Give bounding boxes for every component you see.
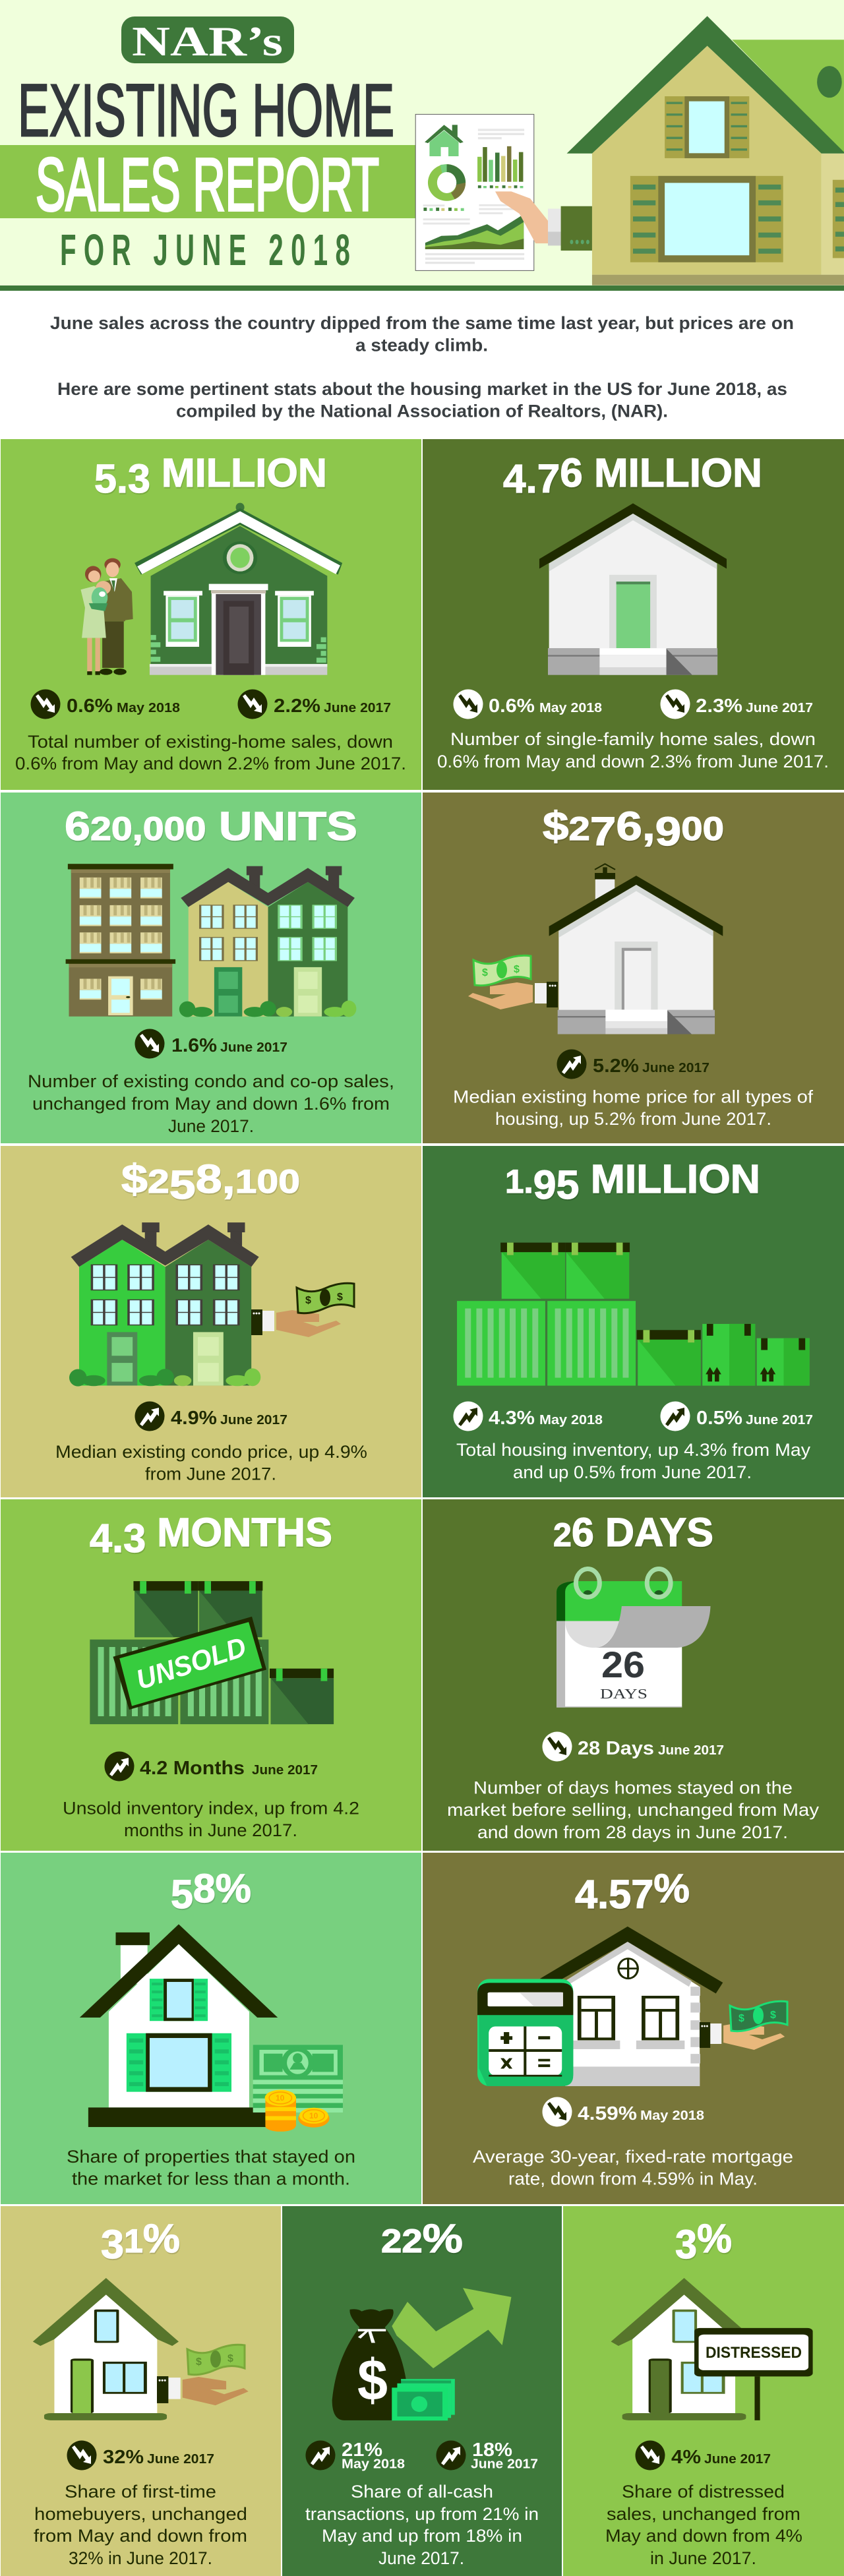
- heading: 8,: [196, 1156, 235, 1201]
- badge: down 2.2% June 2017: 2.2%: [274, 696, 320, 717]
- illustration: white house with chimney: [549, 864, 723, 1034]
- description: Total housing inventory, up 4.3% from May: [456, 1440, 811, 1460]
- panel: 5.3 million total sales: [1, 439, 421, 790]
- sign text: unsold: UNSOLD: [133, 1631, 250, 1695]
- description: June 2017.: [168, 1116, 254, 1136]
- badge: down 2.3% June 2017: June 2017: [746, 701, 813, 715]
- illustration: white house: [539, 503, 727, 675]
- description: [34, 2482, 247, 2568]
- panel: 58% sold within a month: [1, 1853, 421, 2204]
- intro text: June sales across the country dipped from the same time last year, but prices are on: [50, 313, 794, 333]
- description: homebuyers, unchanged: [34, 2504, 247, 2524]
- badge: up 5.2% June 2017: 5.2%: [593, 1056, 639, 1077]
- heading: 7: [590, 809, 616, 854]
- description: and up 0.5% from June 2017.: [513, 1462, 752, 1482]
- panel: 4.3 months unsold inventory: [1, 1499, 421, 1851]
- heading: %: [653, 1866, 690, 1911]
- description: June 2017.: [378, 2548, 464, 2568]
- panel: 620,000 units condo sales: [1, 793, 421, 1143]
- heading: 3: [101, 2222, 124, 2267]
- illustration: big house: [567, 16, 844, 285]
- badge: down 2.3% June 2017: 2.3%: [696, 696, 742, 717]
- description: rate, down from 4.59% in May.: [508, 2169, 758, 2189]
- heading: MONTHS: [146, 1510, 332, 1555]
- description: sales, unchanged from: [607, 2504, 800, 2524]
- badge: down 4% June 2017: 4%: [671, 2447, 701, 2468]
- icon: calendar: 26: [601, 1644, 645, 1685]
- panel: 26 days on market: [423, 1499, 844, 1851]
- description: the market for less than a month.: [72, 2169, 350, 2189]
- panel: 3% distressed sales: [563, 2206, 844, 2576]
- illustration: report held by hand: [415, 114, 592, 270]
- heading: 9: [655, 809, 681, 854]
- panel: $258,100 median condo price: [1, 1146, 421, 1497]
- description: Average 30-year, fixed-rate mortgage: [473, 2147, 793, 2167]
- heading: MILLION: [150, 450, 327, 495]
- heading: 100: [235, 1163, 300, 1200]
- description: Median existing condo price, up 4.9%: [55, 1442, 367, 1462]
- illustration: house with distressed sign: [611, 2278, 813, 2420]
- badge: up 0.5% June 2017: 0.5%: [696, 1408, 742, 1429]
- badge: down 1.6% June 2017: June 2017: [220, 1040, 287, 1055]
- description: Share of distressed: [622, 2482, 785, 2501]
- badge: down 0.6% May 2018: May 2018: [539, 701, 602, 715]
- description: Total number of existing-home sales, down: [28, 732, 393, 752]
- description: market before selling, unchanged from May: [447, 1800, 820, 1820]
- heading: 6 MILLION: [560, 450, 762, 495]
- badge: up 18% June 2017: 18%: [472, 2440, 512, 2461]
- description: from May and down from: [34, 2526, 247, 2546]
- badge: down 2.2% June 2017: [237, 690, 391, 719]
- title: sales report: SALES REPORT: [36, 143, 379, 226]
- badge: up 4.3% May 2018: [454, 1402, 603, 1431]
- heading: 1.: [505, 1163, 533, 1200]
- illustration: green condos: [69, 1222, 260, 1387]
- description: Number of days homes stayed on the: [473, 1778, 793, 1797]
- heading: 26 DAYS: [553, 1510, 713, 1555]
- description: Share of all-cash: [351, 2482, 493, 2501]
- panel: 22% all-cash transactions: [282, 2206, 562, 2576]
- badge: up 4.9% June 2017: [135, 1402, 287, 1431]
- illustration: house and calculator: [477, 1927, 723, 2086]
- green title band: [0, 145, 417, 218]
- coin labels: 10: [276, 2093, 285, 2103]
- panel: 31% first-time homebuyers: [1, 2206, 281, 2576]
- badge: down 0.6% May 2018: May 2018: [117, 701, 180, 715]
- description: from June 2017.: [145, 1464, 276, 1483]
- illustration: money bag, arrow and cash: $: [357, 2347, 388, 2412]
- description: [456, 1440, 811, 1482]
- illustration: house with money and coins: [80, 1924, 343, 2132]
- coin labels: 10: [309, 2111, 318, 2120]
- illustration: family and green house: [80, 503, 342, 675]
- badge: up 4.2 months June 2017: [104, 1751, 318, 1782]
- illustration: money bag, arrow and cash: [332, 2288, 511, 2420]
- badge: up 21% May 2018: [306, 2440, 405, 2471]
- badge: down 1.6% June 2017: 1.6%: [171, 1035, 217, 1056]
- description: [28, 1071, 394, 1136]
- heading: 4.3: [90, 1516, 146, 1561]
- badge: down 0.6% May 2018: [30, 690, 180, 719]
- badge: up 4.3% May 2018: 4.3%: [489, 1408, 535, 1429]
- heading: 95: [533, 1162, 579, 1207]
- heading: 4.57: [575, 1872, 653, 1917]
- description: Median existing home price for all types of: [453, 1087, 814, 1106]
- badge: up 21% May 2018: May 2018: [342, 2457, 405, 2471]
- heading: 5.3: [94, 456, 150, 501]
- heading: 22%: [381, 2216, 463, 2261]
- icon: calendar: DAYS: [600, 1686, 648, 1702]
- illustration: house with distressed sign: DISTRESSED: [706, 2344, 802, 2362]
- description: months in June 2017.: [124, 1820, 297, 1840]
- badge: down 0.6% May 2018: [454, 690, 602, 719]
- heading: $2: [121, 1156, 166, 1201]
- title: for june 2018: FOR JUNE 2018: [60, 225, 350, 275]
- badge: up 5.2% June 2017: [557, 1050, 709, 1079]
- badge: up 4.2 months June 2017: June 2017: [252, 1763, 318, 1778]
- heading: 8%: [193, 1866, 251, 1911]
- description: housing, up 5.2% from June 2017.: [495, 1109, 771, 1129]
- heading: 5: [169, 1162, 196, 1207]
- coin labels: [276, 2093, 318, 2120]
- description: [447, 1778, 820, 1842]
- description: Unsold inventory index, up from 4.2: [63, 1799, 359, 1818]
- badge: down 32% June 2017: [67, 2441, 214, 2470]
- icon: hand holding money: [157, 2345, 249, 2405]
- description: and down from 28 days in June 2017.: [477, 1822, 788, 1842]
- heading: 00: [681, 810, 724, 847]
- heading: 3: [675, 2222, 697, 2267]
- badge: down 28 days June 2017: 28 Days: [578, 1738, 654, 1759]
- badge: up 0.5% June 2017: June 2017: [746, 1413, 813, 1427]
- description: 0.6% from May and down 2.3% from June 2017.: [437, 752, 829, 771]
- illustration: unsold boxes: [90, 1581, 334, 1724]
- badge: down 2.2% June 2017: June 2017: [324, 701, 391, 715]
- badge: down 4.59% May 2018: [542, 2097, 704, 2127]
- intro text: compiled by the National Association of Realtors, (NAR).: [176, 401, 668, 421]
- description: [63, 1799, 359, 1840]
- badge: up 18% June 2017: [437, 2440, 538, 2471]
- badge: up 4.3% May 2018: May 2018: [539, 1413, 603, 1427]
- panel: $276,900 median home price: [423, 793, 844, 1143]
- intro text: Here are some pertinent stats about the housing market in the US for June 2018, as: [57, 379, 787, 399]
- description: unchanged from May and down 1.6% from: [32, 1094, 390, 1114]
- badge: up 5.2% June 2017: June 2017: [642, 1061, 709, 1075]
- panel: 4.76 million single-family sales: [423, 439, 844, 790]
- badge: down 2.3% June 2017: [661, 690, 813, 719]
- intro text: [50, 313, 794, 421]
- badge: down 0.6% May 2018: 0.6%: [67, 696, 113, 717]
- badge: up 4.9% June 2017: June 2017: [220, 1413, 287, 1427]
- badge: down 28 days June 2017: June 2017: [658, 1743, 724, 1758]
- description: May and down from 4%: [605, 2526, 802, 2546]
- icon: calendar: [557, 1569, 711, 1708]
- NAR's badge: NAR’s: [132, 18, 283, 65]
- description: May and up from 18% in: [322, 2526, 522, 2546]
- badge: up 18% June 2017: June 2017: [471, 2457, 538, 2471]
- badge: down 0.6% May 2018: 0.6%: [489, 696, 535, 717]
- description: transactions, up from 21% in: [305, 2504, 539, 2524]
- description: in June 2017.: [650, 2548, 756, 2568]
- heading: MILLION: [579, 1156, 760, 1201]
- badge: up 21% May 2018: 21%: [342, 2440, 382, 2461]
- icon: hand holding money: [700, 2001, 787, 2050]
- badge: down 4% June 2017: [636, 2441, 771, 2470]
- description: [437, 729, 829, 771]
- description: [473, 2147, 793, 2189]
- heading: 1: [124, 2223, 143, 2260]
- panel: 1.95 million housing inventory: [423, 1146, 844, 1497]
- badge: down 1.6% June 2017: [135, 1029, 287, 1059]
- heading: 6,: [616, 804, 655, 849]
- icon: hand giving money: [468, 955, 558, 1009]
- heading: 5: [171, 1872, 193, 1917]
- panel: 4.57% mortgage rate: [423, 1853, 844, 2204]
- heading: $2: [543, 804, 587, 849]
- badge: down 28 days June 2017: [542, 1731, 724, 1762]
- badge: down 4% June 2017: June 2017: [704, 2452, 771, 2467]
- description: [453, 1087, 814, 1129]
- description: [305, 2482, 539, 2568]
- description: [605, 2482, 802, 2568]
- heading: 620,000 UNITS: [65, 804, 357, 849]
- badge: down 4.59% May 2018: 4.59%: [578, 2103, 637, 2124]
- description: 0.6% from May and down 2.2% from June 2017.: [15, 754, 406, 773]
- description: 32% in June 2017.: [69, 2548, 212, 2568]
- description: [67, 2147, 355, 2189]
- illustration: stacked boxes: [457, 1243, 810, 1386]
- description: Share of properties that stayed on: [67, 2147, 355, 2167]
- badge: down 4.59% May 2018: May 2018: [640, 2109, 704, 2123]
- header banner: [0, 0, 844, 291]
- description: Number of existing condo and co-op sales,: [28, 1071, 394, 1091]
- illustration: small house: [33, 2278, 179, 2420]
- description: Number of single-family home sales, down: [450, 729, 816, 749]
- badge: up 4.2 months June 2017: 4.2 Months: [140, 1758, 245, 1779]
- badge: up 0.5% June 2017: [661, 1402, 813, 1431]
- badge: up 4.9% June 2017: 4.9%: [171, 1408, 217, 1429]
- description: Share of first-time: [65, 2482, 216, 2501]
- heading: %: [697, 2216, 732, 2261]
- title: existing home: EXISTING HOME: [18, 69, 394, 152]
- heading: 4.7: [503, 456, 560, 501]
- NAR's badge: [121, 16, 294, 65]
- heading: %: [143, 2216, 179, 2261]
- description: [15, 732, 406, 773]
- illustration: condo buildings: [66, 864, 356, 1017]
- intro text: a steady climb.: [355, 335, 488, 355]
- description: [55, 1442, 367, 1483]
- icon: hand holding money: [251, 1283, 354, 1337]
- badge: down 32% June 2017: June 2017: [147, 2452, 214, 2467]
- badge: down 32% June 2017: 32%: [103, 2447, 144, 2468]
